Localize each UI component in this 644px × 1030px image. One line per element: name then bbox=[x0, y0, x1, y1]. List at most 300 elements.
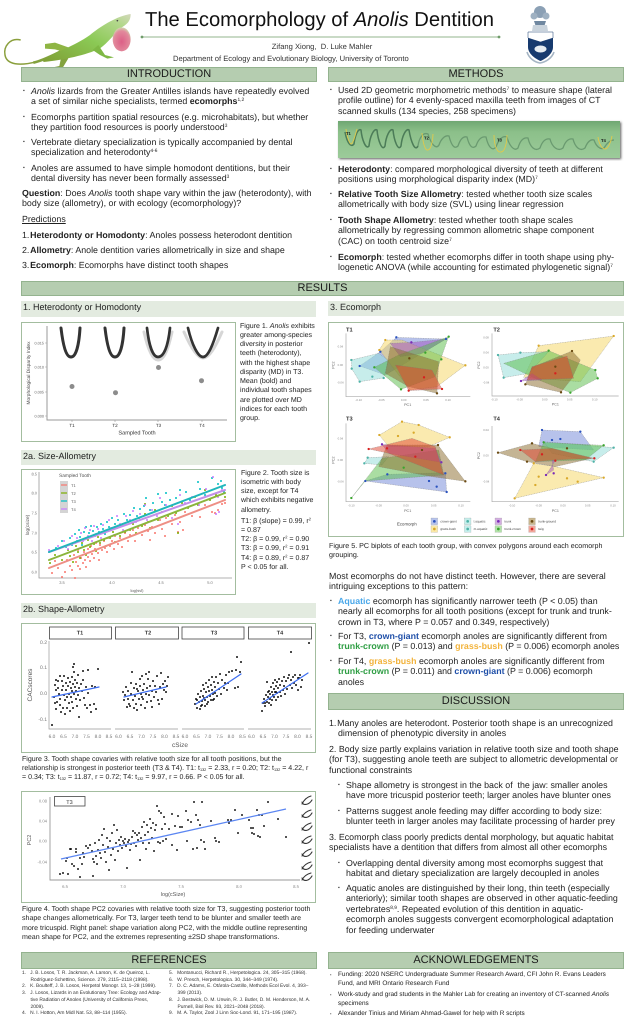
question: Question: Does Anolis tooth shape vary within the jaw (heterodonty), with bbox=[22, 188, 312, 198]
panel: figure 5 PC biplots bbox=[328, 322, 624, 536]
x tick labels: 8.5 bbox=[106, 734, 113, 740]
polygons: T3 bbox=[351, 422, 465, 498]
bullet: homodont bbox=[31, 163, 290, 184]
caption: figure 1: individual tooth shapes bbox=[240, 387, 312, 394]
strip labels: T3 bbox=[211, 630, 217, 636]
subheading: ecomorph: 3. Ecomorph bbox=[330, 302, 381, 312]
image: CT scan of maxilla teeth T1 to T4: T3 bbox=[497, 138, 503, 142]
biplot tick labels: 0.04 bbox=[338, 437, 343, 440]
funding: Funding: 2020 NSERC Undergraduate Summer Research Award, CFI John R. Evans Leaders bbox=[338, 971, 606, 978]
x tick labels: 8.0 bbox=[228, 734, 235, 740]
axis titles: log(cSize) bbox=[161, 892, 185, 898]
biplot axis titles: PC1 bbox=[552, 509, 559, 513]
tick labels bbox=[31, 472, 38, 574]
y tick labels: 0.04 bbox=[39, 818, 48, 824]
biplot tick labels: 0.00 bbox=[403, 504, 409, 507]
heading: results bbox=[21, 281, 624, 296]
biplot tick labels: -0.10 bbox=[491, 398, 498, 401]
legend: T1 bbox=[71, 483, 76, 488]
caption: figure 3 bbox=[22, 756, 308, 781]
method: shape allometry: Tooth Shape Allometry: tested whether tooth shape scales bbox=[338, 215, 573, 225]
x tick labels bbox=[49, 734, 313, 740]
references column 1 bbox=[22, 970, 161, 1016]
point 3 bbox=[329, 832, 614, 852]
text: methods overview bbox=[338, 85, 612, 116]
authors: Zifang Xiong, D. Luke Mahler bbox=[272, 42, 372, 51]
bullet: T4: trunk-crown (P = 0.011) and crown-giant (P = 0.006) ecomorph bbox=[338, 666, 593, 676]
text: intro bullets and question bbox=[22, 86, 312, 270]
x tick labels: 7.5 bbox=[150, 734, 157, 740]
biplot tick labels: 0.08 bbox=[483, 336, 489, 339]
biplot tick labels: -0.05 bbox=[535, 504, 542, 507]
heading: methods bbox=[328, 67, 624, 82]
bullet: overlapping diversity: habitat and dietary specialization are largely decoupled in anoles bbox=[346, 868, 599, 878]
regression lines bbox=[52, 673, 308, 704]
caption: figure 3: relationship is strongest in posterior teeth (T3 & T4). T1: t132 = 2.33, r = 0.20; T2: t132 = 4.22, r bbox=[22, 765, 308, 772]
legend bbox=[59, 473, 91, 513]
caption: figure 4: shape changes allometrically. For T3, larger teeth tend to be blunter and smaller teeth are bbox=[22, 915, 301, 922]
x labels: T3 bbox=[156, 423, 162, 428]
biplot tick labels: -0.05 bbox=[375, 504, 382, 507]
axis tick labels: 0.005 bbox=[34, 390, 44, 394]
point 3: 3. Ecomorph class poorly predicts dental morphology, but aquatic habitat bbox=[329, 832, 613, 842]
predictions heading: Predictions bbox=[22, 214, 66, 224]
point 1 bbox=[329, 718, 613, 738]
bullet: aquatic anoles: Aquatic anoles are distinguished by their long, thin teeth (especially bbox=[346, 883, 610, 893]
legend: T3 bbox=[71, 499, 76, 504]
biplot tick labels: 0.05 bbox=[431, 504, 437, 507]
references column 1: tive Radiation of Anoles (University of California Press, bbox=[30, 998, 148, 1003]
facet label T3 bbox=[54, 796, 85, 806]
bullet: aquatic: crown in T3, where P = 0.057 and 0.349, respectively) bbox=[338, 617, 549, 627]
biplot panel labels: T1 bbox=[346, 327, 353, 333]
scatter points bbox=[60, 802, 286, 877]
x labels: T2 bbox=[112, 423, 118, 428]
biplot tick labels: 0.05 bbox=[567, 398, 573, 401]
biplot axis titles: PC2 bbox=[332, 361, 336, 369]
axis titles: cSize bbox=[172, 742, 188, 749]
point 1: 1. Many anoles are heterodont. Posterior tooth shape is an unrecognized bbox=[329, 718, 613, 728]
image: CT scan of maxilla teeth T1 to T4 bbox=[338, 120, 623, 161]
bullet: aquatic anoles: vertebrates8,9. Repeated evolution of this dentition in aquatic- bbox=[346, 904, 583, 914]
point 2: 2. Body size partly explains variation in relative tooth size and tooth shape bbox=[329, 744, 619, 754]
icon: university crest bbox=[526, 6, 555, 64]
references column 2: 399 (2013). bbox=[178, 991, 202, 996]
bullet: shape allometry: have more tricuspid posterior teeth; larger anoles have blunter ones bbox=[346, 790, 611, 800]
polygons: T2 bbox=[498, 336, 614, 393]
x tick labels: 6.5 bbox=[62, 884, 69, 889]
mean disparity points bbox=[70, 365, 204, 395]
references column 2: 7. D. C. Adams, E. Otárola-Castillo, Methods Ecol Evol. 4, 393– bbox=[169, 984, 308, 989]
tick labels: 8.5 bbox=[31, 472, 38, 476]
funding bbox=[338, 970, 606, 989]
biplot tick labels: -0.10 bbox=[355, 398, 362, 402]
heading: acknowledgements bbox=[328, 952, 624, 968]
x labels: T4 bbox=[199, 423, 205, 428]
caption: figure 1: Figure 1. Anolis exhibits bbox=[240, 322, 315, 330]
axes bbox=[39, 472, 232, 578]
biplot axis titles bbox=[332, 361, 559, 513]
panel: figure 4 PC2 scatter with tooth outlines: PC2 bbox=[27, 835, 33, 845]
caption: figure 4: Figure 4. Tooth shape PC2 covaries with relative tooth size for T3, suggesting posterior tooth bbox=[22, 906, 310, 913]
subheading: heterodonty: 1. Heterodonty or Homodonty bbox=[23, 302, 141, 312]
biplot axis titles: PC2 bbox=[332, 456, 336, 464]
x tick labels: 8.5 bbox=[239, 734, 246, 740]
bullet: aquatic: nearly all ecomorphs for all tooth positions (except for trunk and trunk- bbox=[338, 606, 612, 616]
biplot panel labels: T4 bbox=[493, 416, 500, 422]
biplot tick labels: 0.10 bbox=[592, 398, 598, 401]
text: figure 2 slopes: T1: β (slope) = 0.99, r2 bbox=[241, 516, 311, 524]
facet strips bbox=[50, 627, 312, 639]
strip labels bbox=[77, 630, 284, 636]
x tick labels: 7.0 bbox=[120, 884, 127, 889]
biplot axis titles: PC1 bbox=[404, 403, 411, 407]
tick labels: 6.5 bbox=[31, 550, 38, 554]
biplot tick labels: 0.10 bbox=[610, 504, 616, 507]
axes bbox=[50, 797, 300, 880]
heading: methods: METHODS bbox=[448, 68, 504, 80]
x tick labels: 6.0 bbox=[248, 734, 255, 740]
bullet: homodont: Anoles are assumed to have simple homodont dentitions, but their bbox=[31, 163, 290, 173]
tick labels: 7.0 bbox=[31, 530, 38, 536]
x tick labels: log(svl) bbox=[131, 588, 144, 593]
x tick labels: 7.0 bbox=[138, 734, 145, 740]
strip labels: T1 bbox=[77, 630, 83, 636]
text: figure 2 slopes: P < 0.05 for all. bbox=[241, 564, 288, 571]
y tick labels: 0.00 bbox=[39, 838, 48, 844]
x tick labels: 6.0 bbox=[182, 734, 189, 740]
bullet: T3: For T3, crown-giant ecomorph anoles are significantly different from bbox=[338, 631, 607, 641]
x tick labels: 6.5 bbox=[260, 734, 267, 740]
biplot tick labels: -0.10 bbox=[348, 504, 355, 507]
biplot tick labels: -0.05 bbox=[378, 398, 385, 402]
regression line bbox=[61, 809, 286, 859]
biplot tick labels: -0.04 bbox=[483, 480, 489, 483]
heading: results: RESULTS bbox=[298, 282, 347, 294]
text: figure 2 slopes bbox=[241, 516, 311, 571]
caption: figure 2: Figure 2. Tooth size is bbox=[241, 470, 309, 476]
legend: trunk-ground bbox=[538, 520, 556, 523]
title underline bbox=[140, 36, 500, 38]
bullet: aquatic anoles: anteriorly); similar tooth shapes are observed in other aquatic-feeding bbox=[346, 893, 618, 903]
biplot tick labels: 0.00 bbox=[338, 458, 343, 462]
bullet: overlapping diversity: Overlapping dental diversity among most ecomorphs suggest that bbox=[346, 858, 603, 868]
question: body size (allometry), or with ecology (ecomorphology)? bbox=[22, 198, 241, 208]
bullet: shape allometry bbox=[346, 780, 611, 801]
caption: figure 1: with the highest shape bbox=[240, 360, 310, 366]
results intro: Most ecomorphs do not have distinct teeth. However, there are several bbox=[329, 571, 606, 581]
image: CT scan of maxilla teeth T1 to T4: T2 bbox=[424, 136, 430, 140]
biplot tick labels: 0.05 bbox=[585, 504, 591, 507]
bullet: shape allometry: Shape allometry is strongest in the back of the jaw: smaller anoles bbox=[346, 780, 608, 790]
point 2: functional constraints bbox=[329, 765, 412, 775]
tick labels: 7.5 bbox=[31, 510, 38, 516]
caption: figure 4: more tricuspid. Right panel: shape variation along PC2, with the middle outline representing bbox=[22, 924, 307, 932]
biplot tick labels: 0.00 bbox=[483, 454, 489, 457]
bullet: partition: they partition food resources is poorly understood3 bbox=[31, 122, 227, 132]
x tick labels: 7.0 bbox=[72, 734, 79, 740]
x tick labels: 6.0 bbox=[115, 734, 122, 740]
polygons: T4 bbox=[498, 430, 614, 498]
method: heterodonty bbox=[338, 164, 603, 185]
method: relative size allometry bbox=[338, 189, 592, 210]
caption: figure 2: which exhibits negative bbox=[241, 497, 313, 504]
legend bbox=[397, 518, 556, 532]
x tick labels: 8.5 bbox=[306, 734, 313, 740]
caption: figure 1: are plotted over MD bbox=[240, 396, 302, 404]
results intro: intriguing exceptions to this pattern: bbox=[329, 581, 468, 591]
method: shape allometry: (CAC) on tooth centroid size7 bbox=[338, 236, 452, 246]
references column 1: 2. K. Boulteff, J. B. Losos, Herpetol Monogr. 13, 1–28 (1999). bbox=[22, 984, 156, 989]
x tick labels: 7.5 bbox=[83, 734, 90, 740]
panel: figure 1 disparity plot bbox=[21, 322, 236, 442]
caption: figure 2: allometry. bbox=[241, 506, 271, 514]
biplot tick labels: -0.10 bbox=[509, 504, 515, 507]
biplot tick labels: 0.10 bbox=[445, 398, 451, 402]
axes bbox=[49, 641, 311, 729]
method: ecomorph: Ecomorph: tested whether ecomorphs differ in tooth shape using phy- bbox=[338, 252, 614, 262]
work-study bbox=[338, 990, 609, 1008]
references column 1: Rodríguez-Schettino, Science. 279, 2115–2118 (1998). bbox=[30, 978, 149, 983]
affiliation: Department of Ecology and Evolutionary Biology, University of Toronto bbox=[173, 54, 409, 63]
caption: figure 1: greater among-species bbox=[240, 332, 312, 339]
bullet: dietary specialization bbox=[31, 137, 293, 158]
text: ecomorph results bbox=[329, 571, 619, 687]
heading: discussion bbox=[328, 693, 624, 710]
scatter: T4 points bbox=[262, 643, 309, 711]
subheading: ecomorph bbox=[328, 301, 624, 316]
bullet: ecomorphs: Anolis lizards from the Greater Antilles islands have repeatedly evolved bbox=[31, 86, 309, 96]
biplot tick labels: 0.05 bbox=[423, 398, 429, 402]
axes bbox=[45, 326, 227, 422]
bullet: aquatic anoles: ecomorph anoles suggests convergent ecomorphological adaptation bbox=[346, 914, 613, 924]
bullet: dietary specialization: specialization and heterodonty4-6 bbox=[31, 147, 157, 157]
legend: trunk bbox=[504, 520, 511, 523]
x tick labels: 7.0 bbox=[271, 734, 278, 740]
bullet: dietary specialization: Vertebrate dietary specialization is typically accompanied by dental bbox=[31, 137, 293, 147]
caption: figure 2 bbox=[241, 470, 314, 514]
text: methods overview: scanned skulls (134 species, 258 specimens) bbox=[338, 106, 516, 116]
axis tick labels: 0.010 bbox=[34, 366, 44, 370]
references column 2: 6. W. Presch, Herpetologica. 30, 344–349 (1974). bbox=[169, 978, 278, 983]
biplot axes bbox=[346, 333, 619, 502]
subheading: heterodonty bbox=[21, 301, 316, 317]
caption: figure 1: group. bbox=[240, 415, 260, 422]
bullet: T4: For T4, grass-bush ecomorph anoles are significantly different from bbox=[338, 656, 605, 666]
prediction 3: 3. Ecomorph: Ecomorphs have distinct tooth shapes bbox=[22, 260, 228, 270]
scatter: T3 points bbox=[195, 657, 241, 709]
caption: figure 1: Mean (bold) and bbox=[240, 378, 291, 385]
x tick labels: 7.5 bbox=[178, 884, 185, 889]
references column 1: 1. J. B. Losos, T. R. Jackman, A. Larson, K. de Queiroz, L. bbox=[22, 971, 150, 976]
axis tick labels bbox=[34, 342, 44, 418]
method: relative size allometry: Relative Tooth Size Allometry: tested whether tooth size scales bbox=[338, 189, 592, 199]
text: figure 2 slopes: = 0.87 bbox=[241, 527, 261, 534]
point 2: (for T3), suggesting anole teeth are subject to allometric developmental or bbox=[329, 754, 618, 764]
caption: figure 1: disparity (MD) in T3. bbox=[240, 369, 303, 376]
bullet: feeding patterns: Patterns suggest anole feeding may differ according to body size: bbox=[346, 806, 602, 816]
x tick labels: 8.5 bbox=[293, 884, 300, 889]
work-study: Work-study and grad students in the Mahler Lab for creating an inventory of CT-scanned Anolis bbox=[338, 990, 609, 998]
x tick labels bbox=[62, 884, 300, 889]
panel: figure 3 shape allometry facets: CACscores bbox=[27, 668, 34, 701]
method: shape allometry bbox=[338, 215, 594, 246]
biplot axis titles: PC2 bbox=[477, 361, 481, 369]
y tick labels: -0.1 bbox=[38, 717, 47, 723]
bullet: T3: trunk-crown (P = 0.013) and grass-bush (P = 0.006) ecomorph anoles bbox=[338, 641, 619, 651]
method: ecomorph bbox=[338, 252, 614, 273]
method: heterodonty: Heterodonty: compared morphological diversity of teeth at different bbox=[338, 164, 603, 174]
biplot tick labels: 0.00 bbox=[560, 504, 566, 507]
x tick labels: 7.5 bbox=[216, 734, 223, 740]
text: figure 2 slopes: T4: β = 0.89, r2 = 0.87 bbox=[241, 553, 309, 562]
references column 2 bbox=[169, 970, 310, 1016]
legend: twig bbox=[538, 527, 544, 531]
x tick labels: 4.5 bbox=[158, 580, 165, 585]
point 2 bbox=[329, 744, 619, 775]
subheading: size allometry bbox=[21, 450, 316, 464]
x tick labels: 6.5 bbox=[127, 734, 134, 740]
references column 2: 8. J. Bestwick, D. M. Unwin, R. J. Butler, D. M. Henderson, M. A. bbox=[169, 998, 310, 1003]
x tick labels: 6.5 bbox=[193, 734, 200, 740]
biplot tick labels: 0.04 bbox=[483, 351, 489, 354]
biplot tick labels: 0.00 bbox=[542, 398, 548, 401]
icon: anole lizard with pink dewlap bbox=[4, 14, 131, 67]
x tick labels: 6.5 bbox=[60, 734, 67, 740]
caption: figure 3: Figure 3. Tooth shape covaries with relative tooth size for all tooth positions, but the bbox=[22, 756, 282, 762]
panel: figure 4 PC2 scatter with tooth outlines bbox=[21, 791, 316, 902]
text: methods overview: profile outline) for 4 evenly-spaced maxilla teeth from images of CT bbox=[338, 95, 600, 105]
x tick labels: 8.0 bbox=[294, 734, 301, 740]
biplot tick labels: 0.04 bbox=[338, 345, 343, 348]
caption: figure 3: = 0.34; T3: t132 = 11.87, r = 0.72; T4: t132 = 9.97, r = 0.66. P < 0.05 for all. bbox=[22, 774, 245, 781]
bullet: T4: anoles bbox=[338, 677, 364, 687]
title: The Ecomorphology of Anolis Dentition bbox=[145, 9, 494, 31]
bullet: feeding patterns: blunter teeth in larger anoles may facilitate processing of harder prey bbox=[346, 816, 615, 826]
bullet: partition bbox=[31, 112, 308, 133]
subheading: size allometry: 2a. Size-Allometry bbox=[23, 451, 96, 461]
legend: m.aquatic bbox=[474, 527, 487, 531]
heading: acknowledgements: ACKNOWLEDGEMENTS bbox=[413, 954, 539, 966]
y tick labels: 0.08 bbox=[39, 798, 48, 804]
text: methods details bbox=[330, 164, 614, 272]
bullet: aquatic: Aquatic ecomorph has significantly narrower teeth (P < 0.05) than bbox=[338, 596, 598, 606]
bullet: partition: Ecomorphs partition spatial resources (e.g. microhabitats), but whether bbox=[31, 112, 308, 122]
point 1: dimension of phenotypic diversity in anoles bbox=[338, 728, 506, 738]
y axis title: Morphological Disparity Index bbox=[26, 341, 32, 404]
biplot tick labels: 0.00 bbox=[483, 366, 489, 369]
biplot axis titles: PC1 bbox=[404, 509, 411, 513]
y tick labels bbox=[37, 798, 48, 864]
x labels: Sampled Tooth bbox=[118, 430, 156, 436]
references column 2: 5. Montanucci, Richard R., Herpetologica. 24, 305–315 (1968). bbox=[169, 971, 307, 976]
biplot panel labels: T2 bbox=[493, 327, 500, 333]
scatter: T1 bbox=[52, 503, 225, 578]
x tick labels: 6.0 bbox=[49, 734, 56, 740]
bullet: T3 bbox=[338, 631, 619, 652]
x tick labels: 3.5 bbox=[59, 580, 66, 585]
bullet: ecomorphs: a set of similar niche specialists, termed ecomorphs1,2 bbox=[31, 96, 244, 106]
biplot axis titles: PC1 bbox=[552, 402, 559, 406]
prediction 1: 1. Heterodonty or Homodonty: Anoles possess heterodont dentition bbox=[22, 230, 292, 240]
text: figure 2 slopes: T3: β = 0.99, r2 = 0.91 bbox=[241, 544, 309, 552]
x tick labels bbox=[59, 580, 214, 593]
bullet: homodont: dental diversity has never been formally assessed3 bbox=[31, 173, 229, 183]
caption: figure 5: grouping. bbox=[329, 551, 359, 559]
bullet: aquatic anoles bbox=[346, 883, 618, 935]
text: figure 2 slopes: T2: β = 0.99, r2 = 0.90 bbox=[241, 534, 309, 543]
axis tick labels: 0.000 bbox=[34, 414, 44, 418]
heading: introduction: INTRODUCTION bbox=[127, 68, 211, 80]
legend: crown-giant bbox=[440, 520, 457, 523]
bullet: aquatic bbox=[338, 596, 612, 627]
scatter: T3 bbox=[49, 478, 224, 552]
outline: T1 bbox=[346, 129, 357, 144]
question bbox=[22, 188, 312, 208]
biplot tick labels: 0.04 bbox=[483, 428, 489, 432]
y tick labels: 0.2 bbox=[40, 640, 47, 646]
scatter: T4 bbox=[49, 477, 222, 550]
legend: grass-bush bbox=[440, 527, 456, 531]
x labels: T1 bbox=[69, 423, 75, 428]
facet label T3: T3 bbox=[66, 800, 73, 806]
text: methods overview: Used 2D geometric morphometric methods7 to measure shape (lateral bbox=[338, 85, 612, 95]
biplot tick labels: 0.10 bbox=[458, 504, 464, 507]
heading: references bbox=[21, 952, 317, 968]
legend: Sampled Tooth bbox=[59, 473, 91, 479]
caption: figure 2: isometric with body bbox=[241, 479, 301, 486]
bullet: overlapping diversity bbox=[346, 858, 603, 879]
point 3: specialists have a dentition that differs from almost all other ecomorphs bbox=[329, 842, 607, 852]
caption: figure 5 bbox=[329, 542, 602, 559]
caption: figure 1 bbox=[240, 322, 315, 422]
biplot tick labels: 0.00 bbox=[401, 398, 407, 402]
work-study: specimens bbox=[338, 1000, 369, 1007]
subheading: shape allometry bbox=[21, 603, 316, 618]
prediction 2: 2. Allometry: Anole dentition varies allometrically in size and shape bbox=[22, 245, 285, 255]
biplot panel labels bbox=[346, 327, 500, 422]
scatter: T2 points bbox=[123, 672, 168, 710]
polygons: T1 bbox=[351, 337, 465, 393]
y tick labels: -0.04 bbox=[37, 860, 48, 864]
y tick labels: 0.0 bbox=[40, 691, 47, 697]
caption: figure 4: mean shape for PC2, and the extremes representing ±2SD shape transformations. bbox=[22, 934, 279, 941]
caption: figure 1: indices for each tooth bbox=[240, 406, 307, 413]
subheading: shape allometry: 2b. Shape-Allometry bbox=[23, 604, 105, 614]
strip labels: T4 bbox=[277, 630, 284, 636]
caption: figure 2: size, except for T4 bbox=[241, 488, 298, 495]
biplot tick labels: -0.04 bbox=[337, 381, 344, 384]
references column 1: 2009). bbox=[30, 1005, 44, 1010]
legend: l.aquatic bbox=[474, 520, 486, 523]
x tick labels: 4.0 bbox=[109, 580, 116, 585]
tick labels: 6.0 bbox=[31, 570, 38, 574]
axis tick labels: 0.015 bbox=[34, 342, 44, 346]
image: CT scan of maxilla teeth T1 to T4: T1 bbox=[346, 131, 352, 136]
panel: figure 3 shape allometry facets bbox=[21, 623, 316, 752]
R scripts help: Alexander Tinius and Miriam Ahmad-Gawel for help with R scripts bbox=[338, 1010, 525, 1016]
funding: Fund, and MRI Ontario Research Fund bbox=[338, 980, 449, 987]
references column 1: 4. N. I. Hotton, Am Midl Nat. 53, 88–114 (1955). bbox=[22, 1011, 127, 1016]
x tick labels: 7.5 bbox=[283, 734, 290, 740]
biplot tick labels bbox=[337, 336, 616, 507]
biplot axis titles: PC2 bbox=[477, 452, 481, 459]
heading: introduction bbox=[21, 67, 317, 82]
bullet: aquatic anoles: for feeding underwater bbox=[346, 925, 434, 935]
references column 2: Purnell, Biol Rev. 93, 2021–2048 (2018). bbox=[178, 1005, 265, 1010]
bullet: T4 bbox=[338, 656, 605, 687]
x tick labels: 5.0 bbox=[207, 580, 214, 585]
